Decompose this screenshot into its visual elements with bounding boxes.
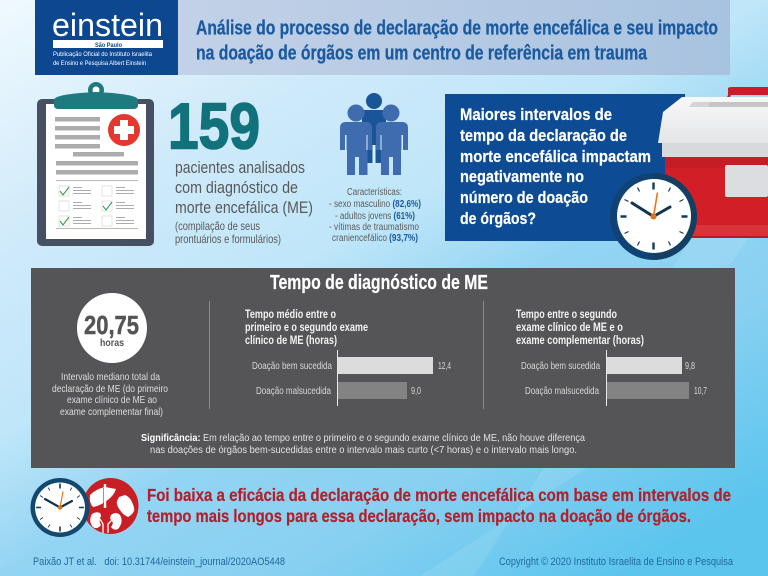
median interval text: exame complementar final) [60,406,163,418]
question panel: tempo da declaração de [460,126,627,145]
characteristics text: - sexo masculino (82,6%) [329,199,421,210]
bar chart: second exam to complementary exam: Tempo entre o segundo [516,309,617,321]
bar chart: first to second exam: Tempo médio entre o [245,309,336,321]
bar chart: first to second exam: Doação malsucedida [256,386,331,397]
bar chart: second exam to complementary exam: Doação bem sucedida [521,361,600,372]
icon: clock small [30,478,90,537]
median interval text: Intervalo mediano total da [61,371,160,383]
citation: Paixão JT et al. doi: 10.31744/einstein_journal/2020AO5448 [33,556,285,568]
significance note: Significância: Em relação ao tempo entre o primeiro e o segundo exame clínico de ME, não houve diferença [141,432,585,444]
bar chart: first to second exam: 12,4 [438,361,451,372]
characteristics text: craniencefálico (93,7%) [332,233,418,244]
logo block: einstein [52,7,163,43]
question panel: Maiores intervalos de [460,105,612,124]
stat: 159 patients [168,90,313,246]
bar chart: first to second exam [245,309,451,406]
question panel: morte encefálica impactam [460,147,651,166]
bar chart: second exam to complementary exam: Doação malsucedida [525,386,599,397]
logo block: Publicação Oficial do Instituto Israelita [53,51,152,58]
title [196,18,718,64]
characteristics text [329,187,421,244]
characteristics text: - vítimas de traumatismo [329,222,419,233]
icon: organ cooler [658,87,768,238]
icon: clock large [610,173,697,260]
stat: 159 patients: pacientes analisados [175,159,305,177]
icon: clipboard [37,82,154,246]
question panel [445,94,685,241]
stat circle: 20,75 hours: horas [100,337,124,349]
stat circle: 20,75 hours [77,293,147,363]
conclusion [147,485,731,526]
header band [35,0,730,75]
question panel: negativamente no [460,167,584,186]
icon: people [340,93,408,175]
median interval text: exame clínico de ME ao [67,394,157,406]
stat: 159 patients: morte encefálica (ME) [175,199,313,217]
bar chart: second exam to complementary exam [516,309,707,406]
bar chart: second exam to complementary exam: exame clínico de ME e o [516,322,623,334]
significance note: nas doações de órgãos bem-sucedidas entre o intervalo mais curto (<7 horas) e o intervalo mais longo. [150,444,577,456]
characteristics text: - adultos jovens (61%) [335,211,415,222]
stat circle: 20,75 hours: 20,75 [84,310,139,340]
stat: 159 patients: (compilação de seus [175,219,260,233]
title: na doação de órgãos em um centro de referência em trauma [196,42,648,64]
bar chart: first to second exam: primeiro e o segundo exame [245,322,368,334]
question panel: de órgãos? [460,209,536,228]
stat: 159 patients: prontuários e formulários) [175,232,281,246]
bar chart: first to second exam: Doação bem sucedida [252,361,332,372]
logo block: São Paulo [95,42,122,49]
bar chart: first to second exam: 9,0 [411,386,421,397]
characteristics text: Características: [347,187,402,198]
median interval text: declaração de ME (do primeiro [52,383,168,395]
median interval text [52,371,168,418]
icon: organs [82,478,138,534]
logo block: de Ensino e Pesquisa Albert Einstein [53,60,146,67]
bar chart: second exam to complementary exam: exame complementar (horas) [516,335,644,347]
stat: 159 patients: 159 [168,90,260,162]
significance note [141,432,585,456]
panel: diagnosis time [31,268,735,468]
bar chart: first to second exam: clínico de ME (horas) [245,335,337,347]
logo block [35,0,178,75]
stat: 159 patients: com diagnóstico de [175,179,298,197]
bar chart: second exam to complementary exam: 10,7 [694,386,707,397]
question panel: número de doação [460,188,588,207]
bar chart: second exam to complementary exam: 9,8 [685,361,695,372]
panel heading: Tempo de diagnóstico de ME [270,272,488,294]
